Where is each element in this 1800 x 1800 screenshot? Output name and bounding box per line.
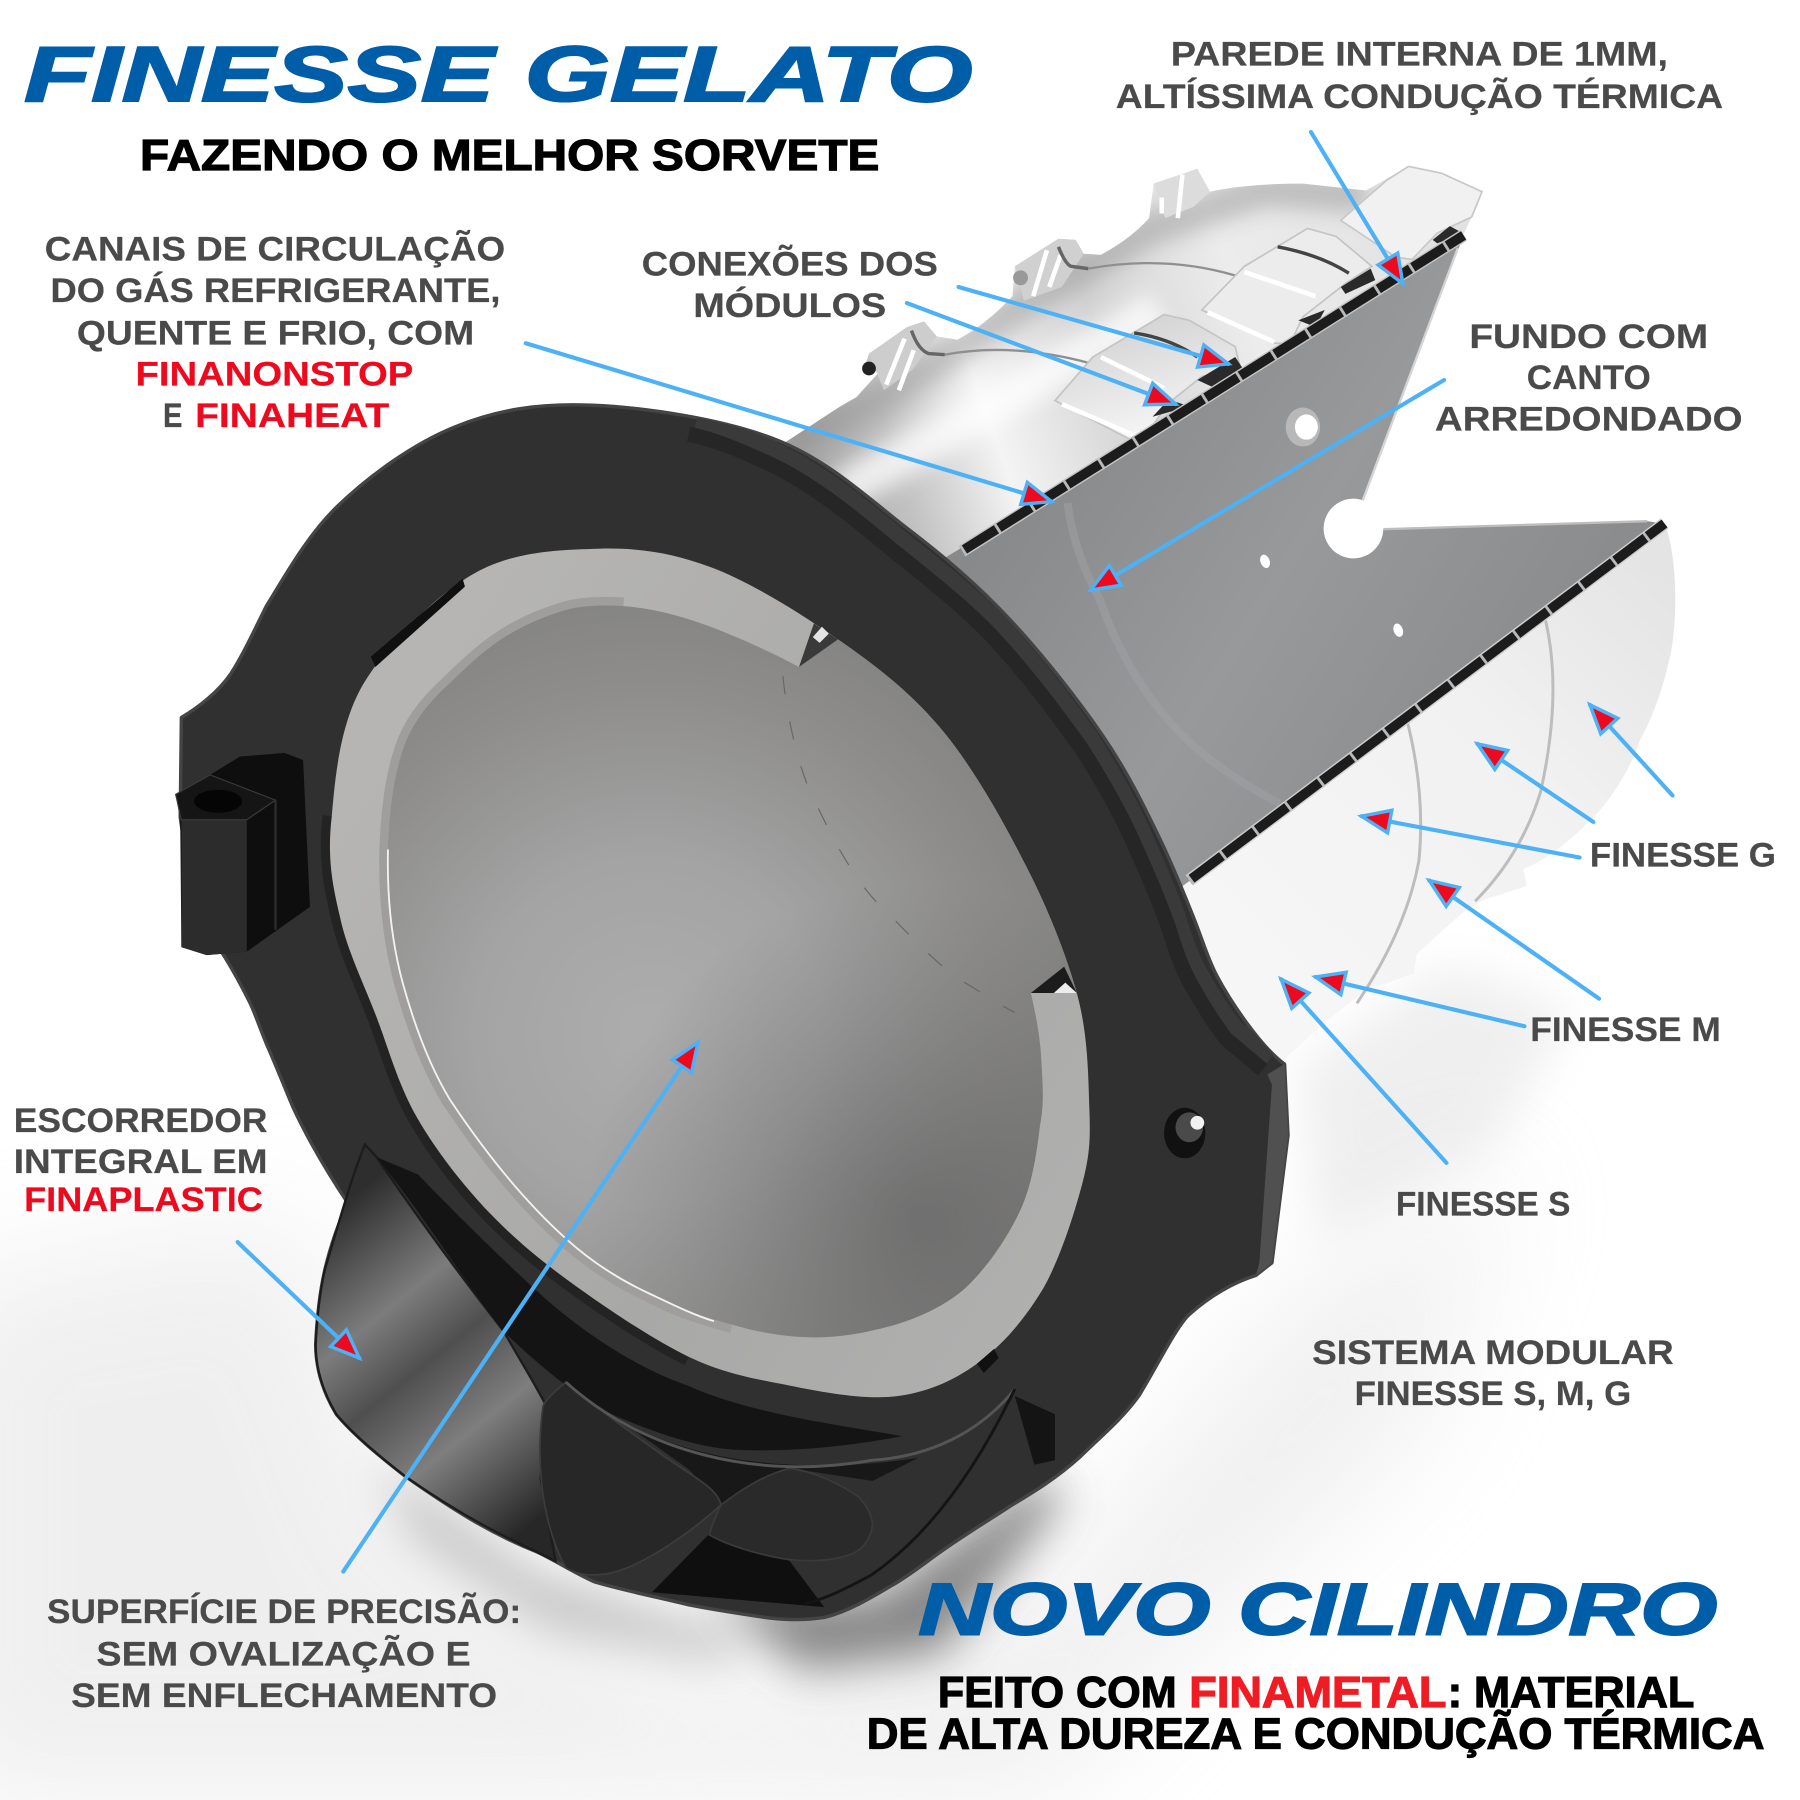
subtitle: FAZENDO O MELHOR SORVETE [140,132,879,180]
arrow: finesse m two [1316,977,1524,1026]
arrow: finesse s [1281,979,1446,1163]
inner surface [388,605,1077,1337]
arrow: finesse g one [1590,705,1673,796]
label: drip tray [14,1102,267,1219]
label: inner wall: ALTÍSSIMA CONDUÇÃO TÉRMICA [1116,78,1723,116]
upper cylinder module with tabs [781,166,1482,574]
label: module connections: MÓDULOS [693,287,886,325]
arrow: finesse m one [1429,880,1599,999]
plate holes [1258,408,1405,638]
label: precision surface [47,1593,521,1715]
seam lines [1357,717,1421,1003]
arrow: channels [526,343,1052,502]
steel ring [330,549,1090,1397]
closing statement: FEITO COM [938,1669,1177,1717]
label: precision surface: SEM OVALIZAÇÃO E [96,1636,471,1674]
closing statement: MATERIAL [1474,1669,1694,1717]
label: circulation channels: DO GÁS REFRIGERANTE, [51,272,501,310]
highlight line [388,849,714,1321]
label: finesse s: FINESSE S [1396,1186,1570,1224]
arrow: inner wall [1311,132,1403,284]
right edge bevel [1256,1064,1288,1275]
label: module connections: CONEXÕES DOS [642,246,938,284]
faint seam dashes [783,676,1015,1012]
label: rounded bottom: FUNDO COM [1469,318,1708,356]
arrow: precision surface [343,1042,698,1572]
petals [540,1382,1055,1607]
label: module connections [642,246,938,325]
black flange ring [180,405,1288,1620]
top edge shading [781,189,1366,494]
heading: novo cilindro: NOVO CILINDRO [918,1568,1717,1651]
steel ring and inner surface [330,549,1090,1397]
label: precision surface: SEM ENFLECHAMENTO [71,1677,497,1715]
label: circulation channels: FINANONSTOP [135,356,413,394]
closing statement: FINAMETAL [1189,1669,1446,1717]
label: rounded bottom: CANTO [1527,359,1651,397]
arrow: connection two [907,303,1176,404]
ring edge bands [689,424,1270,1070]
label: rounded bottom [1435,318,1743,438]
label: circulation channels: QUENTE E FRIO, COM [77,314,474,352]
label: inner wall: PAREDE INTERNA DE 1MM, [1171,35,1668,73]
lower cylinder modules [1148,523,1675,1068]
label: drip tray: FINAPLASTIC [24,1181,263,1219]
mounting bracket [176,753,310,955]
arrow: finesse g three [1361,816,1580,858]
arrow: finesse g two [1477,744,1593,822]
screw [1164,1108,1205,1158]
label: modular system: SISTEMA MODULAR [1312,1334,1674,1372]
closing statement: : [1448,1669,1462,1717]
title: FINESSE GELATO [24,30,972,118]
rounded corner arc [1068,503,1280,804]
bottom plate with rounded corner [918,245,1662,987]
closing statement [867,1669,1764,1758]
label: drip tray: INTEGRAL EM [14,1143,267,1181]
bevel [388,605,732,1325]
label: precision surface: SUPERFÍCIE DE PRECISÃO: [47,1593,521,1631]
floor shadow [0,964,1573,1800]
arrow: drip tray [238,1242,359,1358]
label: inner wall [1116,35,1723,116]
groove [377,1157,902,1450]
drip tray [316,1145,1055,1607]
label: drip tray: ESCORREDOR [14,1102,267,1140]
label: modular system: FINESSE S, M, G [1355,1375,1631,1413]
dark rim [330,816,689,1357]
channel strips [962,235,1665,880]
connector teeth [1153,226,1462,417]
label: finesse m: FINESSE M [1530,1011,1721,1049]
label: modular system [1312,1334,1674,1413]
module connection saddles [1055,166,1482,440]
tab pins [862,169,1235,390]
label: circulation channels: CANAIS DE CIRCULAÇÃO [45,231,505,269]
slot notches [371,579,1077,1373]
arrow: connection one [959,287,1228,364]
label: rounded bottom: ARREDONDADO [1435,400,1743,438]
label: finesse g: FINESSE G [1590,837,1776,875]
label: circulation channels [45,231,505,435]
closing statement: DE ALTA DUREZA E CONDUÇÃO TÉRMICA [867,1708,1764,1758]
label: circulation channels: E [163,397,183,435]
label: circulation channels: FINAHEAT [195,397,390,435]
arrow: rounded bottom [1091,380,1444,590]
lower right shading [388,605,1077,1337]
